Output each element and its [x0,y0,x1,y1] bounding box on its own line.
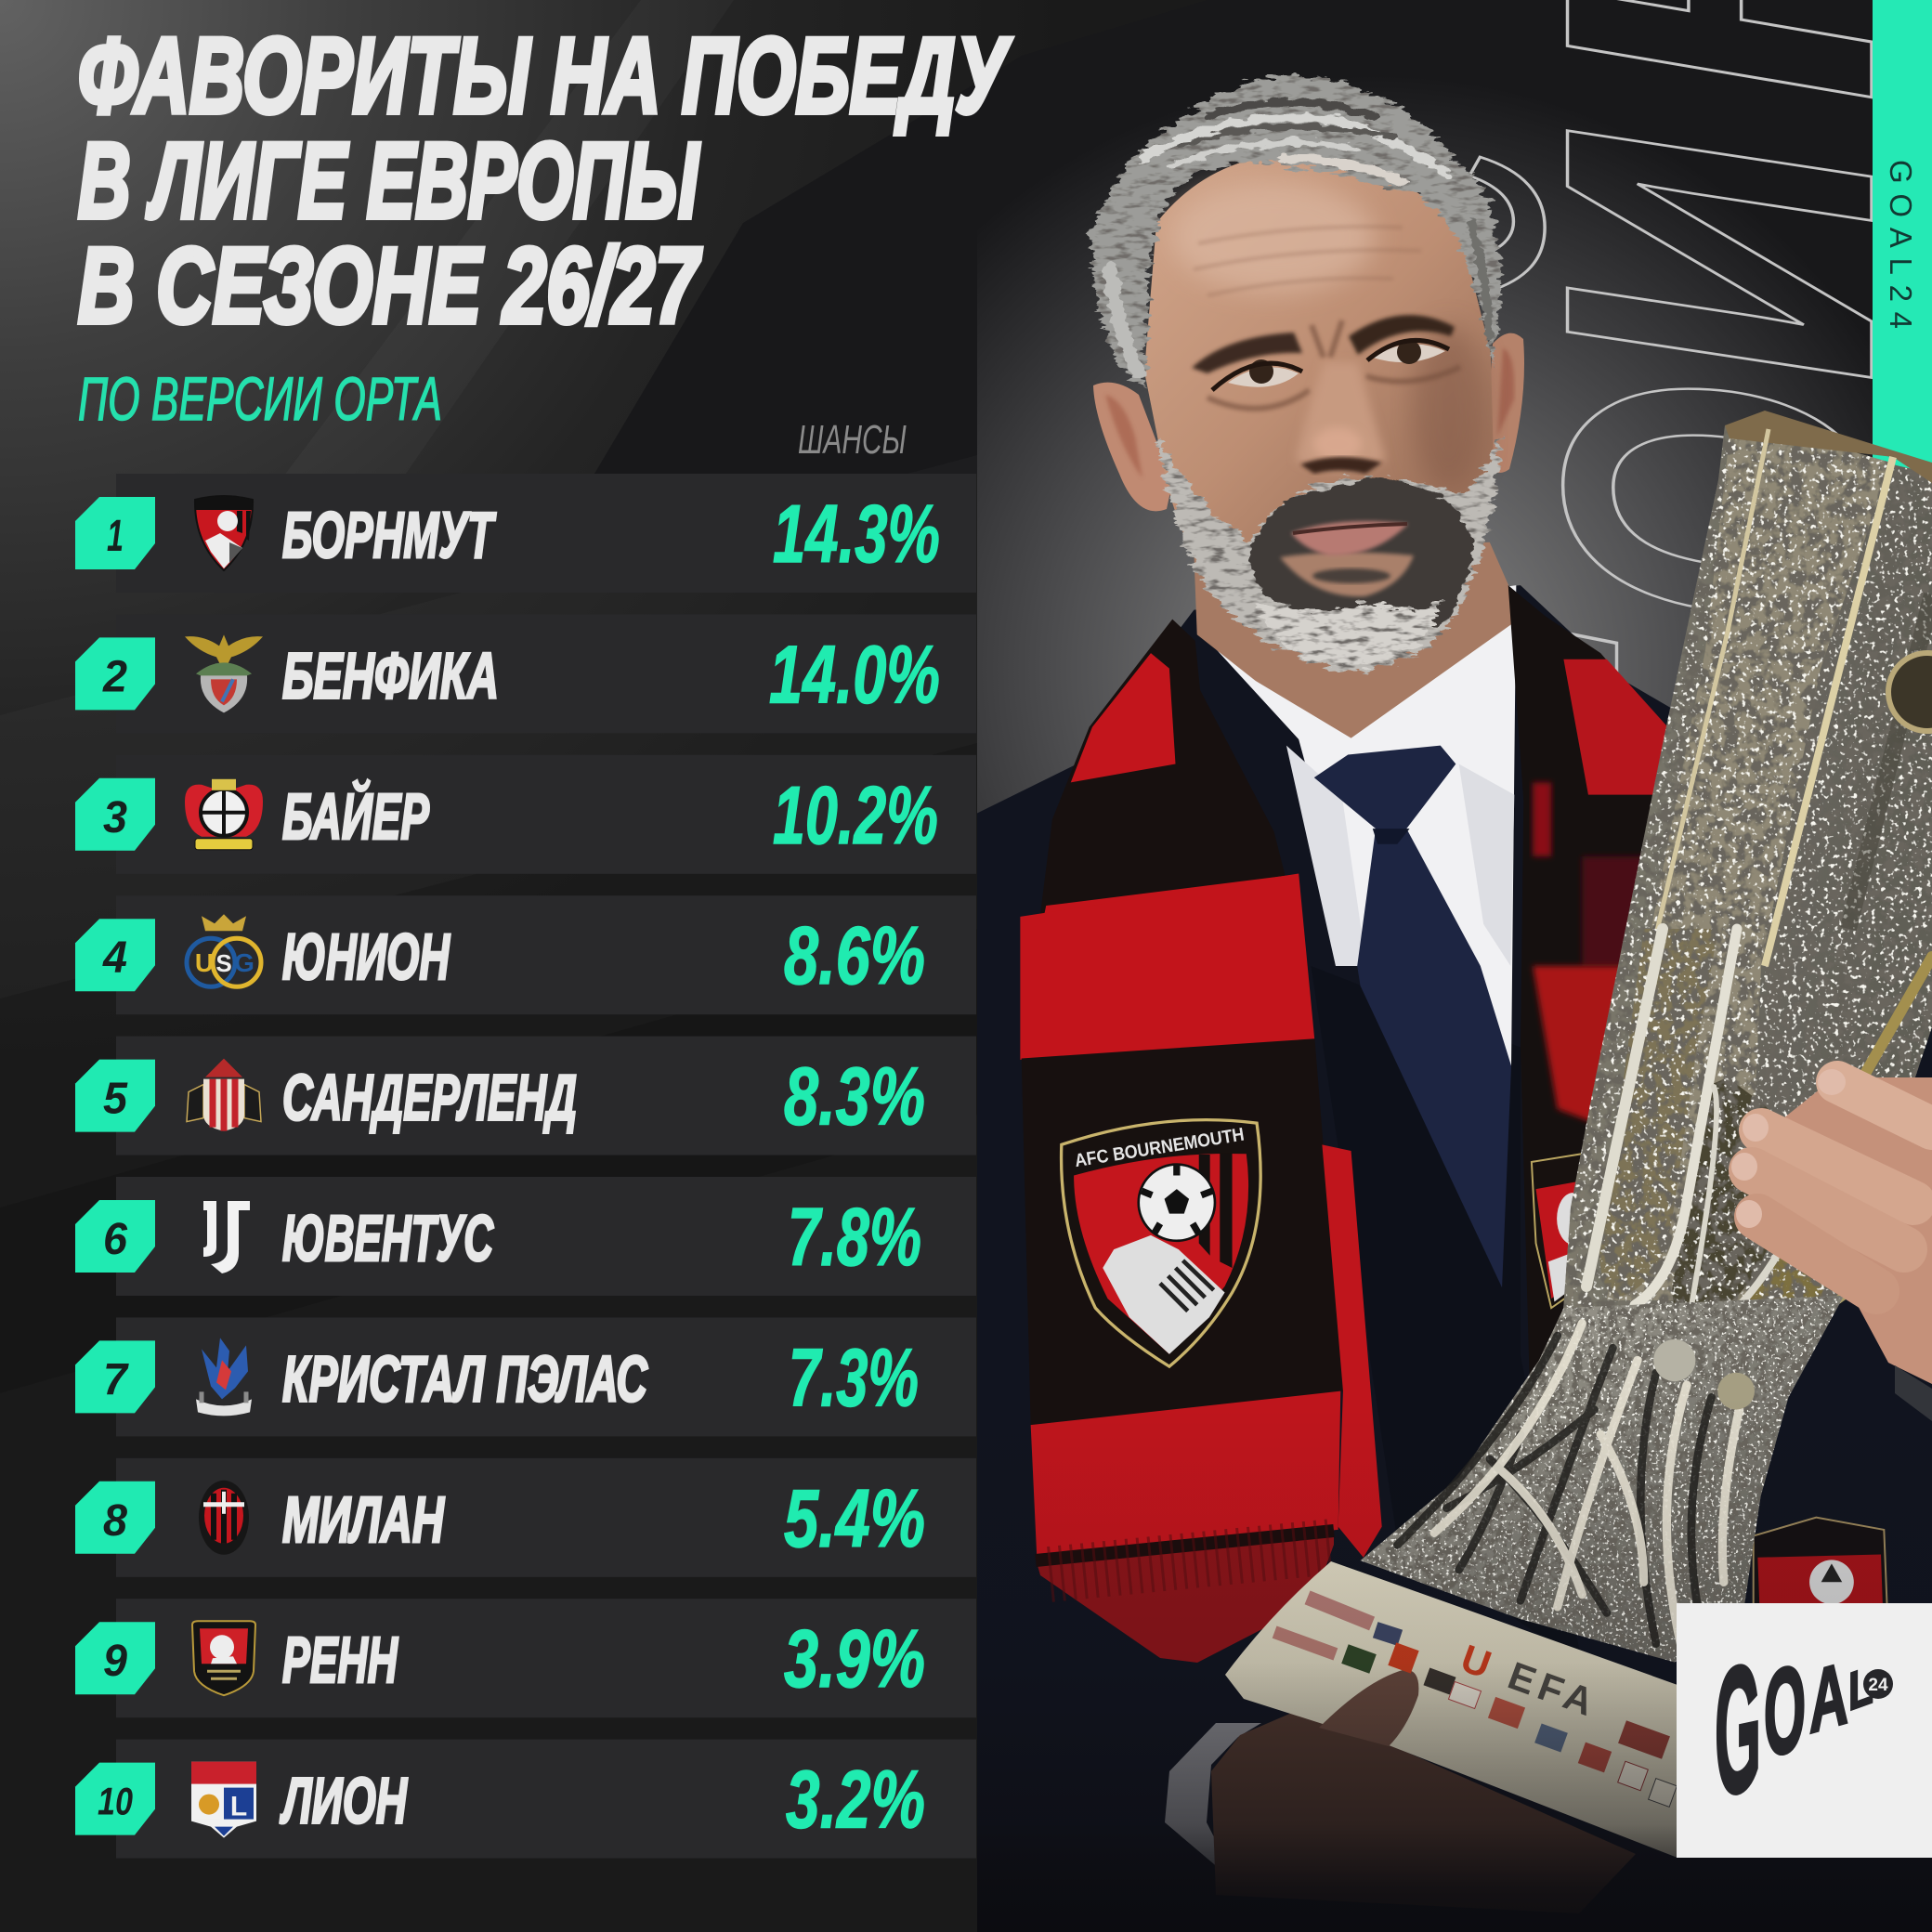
flags [1273,1590,1677,1807]
crest: Bournemouth [195,496,253,570]
rank badge [75,919,155,991]
crest: Benfica [185,634,263,712]
crest: Lyon [191,1762,256,1838]
eye sockets and frown lines [1208,320,1460,409]
rank badge [75,1060,155,1132]
photo: coach with scarf and trophy [977,75,1932,1932]
rank badge: 4 [102,933,127,983]
row background [116,1317,976,1436]
logo wordmark: G [1715,1624,1761,1834]
base lettering: U EFA [1456,1636,1604,1726]
crest: Leverkusen [185,779,263,850]
background outlined lettering [1469,0,1873,672]
row background [116,1599,976,1717]
trophy flute ridges [1586,929,1932,1365]
crest: AC Milan [199,1481,249,1555]
row 6: Ювентус [75,1177,976,1296]
team name: САНДЕРЛЕНД [282,1062,577,1134]
logo wordmark: O [1764,1638,1806,1783]
logo 24 badge [1863,1669,1893,1699]
head [1090,75,1524,671]
face [1144,160,1494,561]
logo wordmark [1715,1624,1873,1834]
percentage: 8.6% [784,909,925,1001]
team name: ЮНИОН [282,920,450,993]
title line 2: В ЛИГЕ ЕВРОПЫ [78,122,699,241]
team name: РЕНН [282,1624,398,1696]
trophy medallion [1888,653,1932,731]
soul patch [1312,568,1390,583]
scarf fringe [1036,1529,1334,1663]
row background [116,614,976,733]
left ear [1093,383,1172,511]
hair [1090,75,1500,390]
logo wordmark: A [1809,1642,1848,1752]
row background [116,1740,976,1859]
trophy rim [1725,411,1932,483]
row background [116,755,976,874]
hair strands [1110,102,1490,372]
bottom shadow [977,1393,1932,1932]
percentage: 14.0% [769,628,940,720]
rank badge: 5 [103,1075,128,1124]
skin under lip [1280,552,1414,596]
trophy base [1225,1561,1677,1858]
brows [1192,333,1302,373]
lips [1291,521,1408,555]
crest: Juventus [203,1201,250,1273]
team name: БАЙЕР [282,778,429,853]
row 7: Кристал Пэлас [75,1317,976,1436]
crest: Union SG: S [215,949,232,977]
beard [1156,437,1501,671]
row background [116,895,976,1014]
rank badge [75,637,155,710]
team name: БОРНМУТ [282,499,496,571]
team name: БЕНФИКА [282,639,499,711]
row 10: Лион [75,1740,976,1859]
rank badge: 10 [98,1780,133,1823]
nose [1296,362,1386,472]
accent strip [1873,0,1932,483]
percentage: 7.3% [789,1331,919,1423]
thumb over base [1319,1670,1418,1746]
trophy figurative neck [1361,1296,1844,1663]
crest: Union SG: G [234,948,255,977]
forehead highlight [1170,181,1375,293]
fingernails [1731,1069,1846,1228]
row 2: Бенфика [75,614,976,733]
trophy left facet [1607,427,1891,1300]
lower hand and cuff [1165,1670,1636,1913]
rank badge: 2 [102,652,127,701]
percentage: 3.2% [786,1754,925,1846]
upper hand [1731,1069,1932,1421]
rank badge [75,1340,155,1413]
title line 3: В СЕЗОНЕ 26/27 [78,227,702,346]
row 5: Сандерленд [75,1037,976,1155]
rank badge: 1 [107,512,124,561]
strip label: GOAL24 [1884,160,1918,333]
column header: ШАНСЫ [798,417,907,463]
row 1: Борнмут [75,474,976,593]
crest lettering: AFC BOURNEMOUTH [1073,1125,1246,1171]
crest: Rennes [192,1621,255,1695]
rank badge [75,497,155,569]
cheek shading [1412,325,1486,492]
rank badge [75,778,155,851]
moustache and beard ring [1251,477,1473,633]
rank badge [75,1482,155,1554]
logo box [1677,1603,1932,1858]
row 8: Милан [75,1458,976,1577]
percentage: 3.9% [784,1612,925,1704]
rank badge [75,1622,155,1694]
rank badge [75,1763,155,1835]
rank badge [75,1200,155,1273]
scarf left side [1034,620,1308,966]
crest: Union SG: U [195,948,214,977]
scarf right side [1508,585,1666,1374]
percentage: 7.8% [788,1191,921,1283]
jacket [977,585,1670,1650]
team name: КРИСТАЛ ПЭЛАС [282,1342,648,1415]
title line 1: ФАВОРИТЫ НА ПОБЕДУ [78,17,1012,136]
rank badge: 9 [103,1637,127,1686]
scarf lower section with stripes [1020,874,1382,1558]
second crest on right scarf [1531,1153,1581,1310]
logo wordmark: L [1848,1654,1873,1723]
team name: ЛИОН [280,1765,408,1837]
rank badge: 7 [103,1355,129,1404]
percentage: 10.2% [773,769,938,861]
eyes [1228,367,1299,387]
row 4: Юнион [75,895,976,1014]
crest: Union SG [187,914,261,986]
rank badge: 3 [103,793,127,842]
rank badge: 6 [103,1215,127,1264]
right ear [1492,333,1524,473]
trophy cup [1563,411,1932,1365]
team name: МИЛАН [282,1483,445,1556]
percentage: 5.4% [784,1472,925,1564]
neck and shirt [1194,542,1516,1066]
percentage: 14.3% [773,488,940,580]
crest: Crystal Palace [196,1338,252,1416]
third crest on jacket bottom right [1754,1518,1887,1607]
title [78,17,1012,346]
row background [116,1177,976,1296]
percentage: 8.3% [784,1051,925,1142]
row 9: Ренн [75,1599,976,1717]
rank badge: 8 [103,1496,127,1546]
row background [116,1458,976,1577]
crest: Lyon: L [230,1792,247,1822]
tie [1314,746,1511,1287]
trophy flutes [1599,929,1853,1356]
team name: ЮВЕНТУС [282,1202,494,1274]
trophy edges [1765,457,1893,966]
chin light beard [1254,599,1442,665]
forehead wrinkles [1194,227,1421,295]
crest: Sunderland [187,1059,261,1131]
row 3: Байер [75,755,976,874]
subtitle: ПО ВЕРСИИ ОРТА [78,364,442,433]
scarf crest: AFC Bournemouth [1062,1120,1260,1366]
row background [116,474,976,593]
row background [116,1037,976,1155]
logo 24 badge: 24 [1868,1676,1888,1695]
